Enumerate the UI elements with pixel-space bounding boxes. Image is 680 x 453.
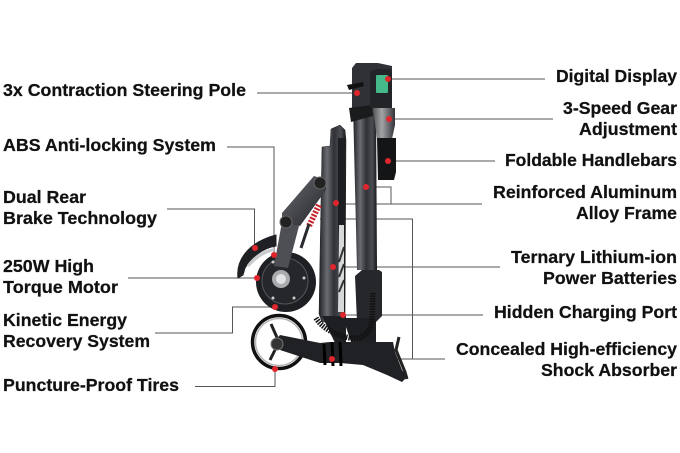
digital display — [370, 69, 392, 108]
speed grip — [373, 108, 395, 139]
labels right: Foldable Handlebars — [505, 150, 677, 170]
scooter illustration — [238, 63, 407, 382]
lower joint — [343, 318, 376, 345]
labels right: Power Batteries — [543, 268, 677, 288]
labels left: Kinetic Energy — [3, 310, 127, 330]
leader lines — [128, 79, 553, 386]
labels right: Shock Absorber — [541, 360, 677, 380]
labels left: ABS Anti-locking System — [3, 135, 216, 155]
labels right: Digital Display — [556, 66, 677, 86]
labels right — [456, 66, 677, 380]
pole lower sleeve — [355, 270, 382, 322]
labels left: Dual Rear — [3, 187, 86, 207]
coiled cable — [316, 293, 373, 338]
kickstand — [396, 337, 407, 379]
labels right: Ternary Lithium-ion — [511, 247, 677, 267]
shock absorber spring — [309, 205, 319, 226]
suspension arm — [282, 176, 326, 226]
labels right: Hidden Charging Port — [494, 302, 677, 322]
labels left — [3, 80, 246, 395]
labels left: Recovery System — [3, 331, 150, 351]
red markers — [252, 76, 392, 372]
rear wheel — [252, 316, 306, 368]
labels right: Concealed High-efficiency — [456, 339, 677, 359]
rear fender — [238, 235, 276, 278]
labels right: Alloy Frame — [576, 203, 677, 223]
labels right: 3-Speed Gear — [563, 98, 677, 118]
mid frame tube — [319, 125, 346, 322]
labels left: 250W High — [3, 256, 94, 276]
labels right: Adjustment — [579, 119, 677, 139]
folding base and rear arm — [272, 335, 407, 382]
hub motor wheel — [256, 252, 316, 312]
labels left: Torque Motor — [3, 277, 118, 297]
handle head — [352, 63, 392, 110]
main steering pole — [353, 104, 377, 270]
labels left: Puncture-Proof Tires — [3, 375, 179, 395]
labels left: 3x Contraction Steering Pole — [3, 80, 246, 100]
labels left: Brake Technology — [3, 208, 157, 228]
labels right: Reinforced Aluminum — [493, 182, 677, 202]
foldable handle grip — [377, 138, 396, 180]
silver deck stripe — [338, 138, 345, 310]
